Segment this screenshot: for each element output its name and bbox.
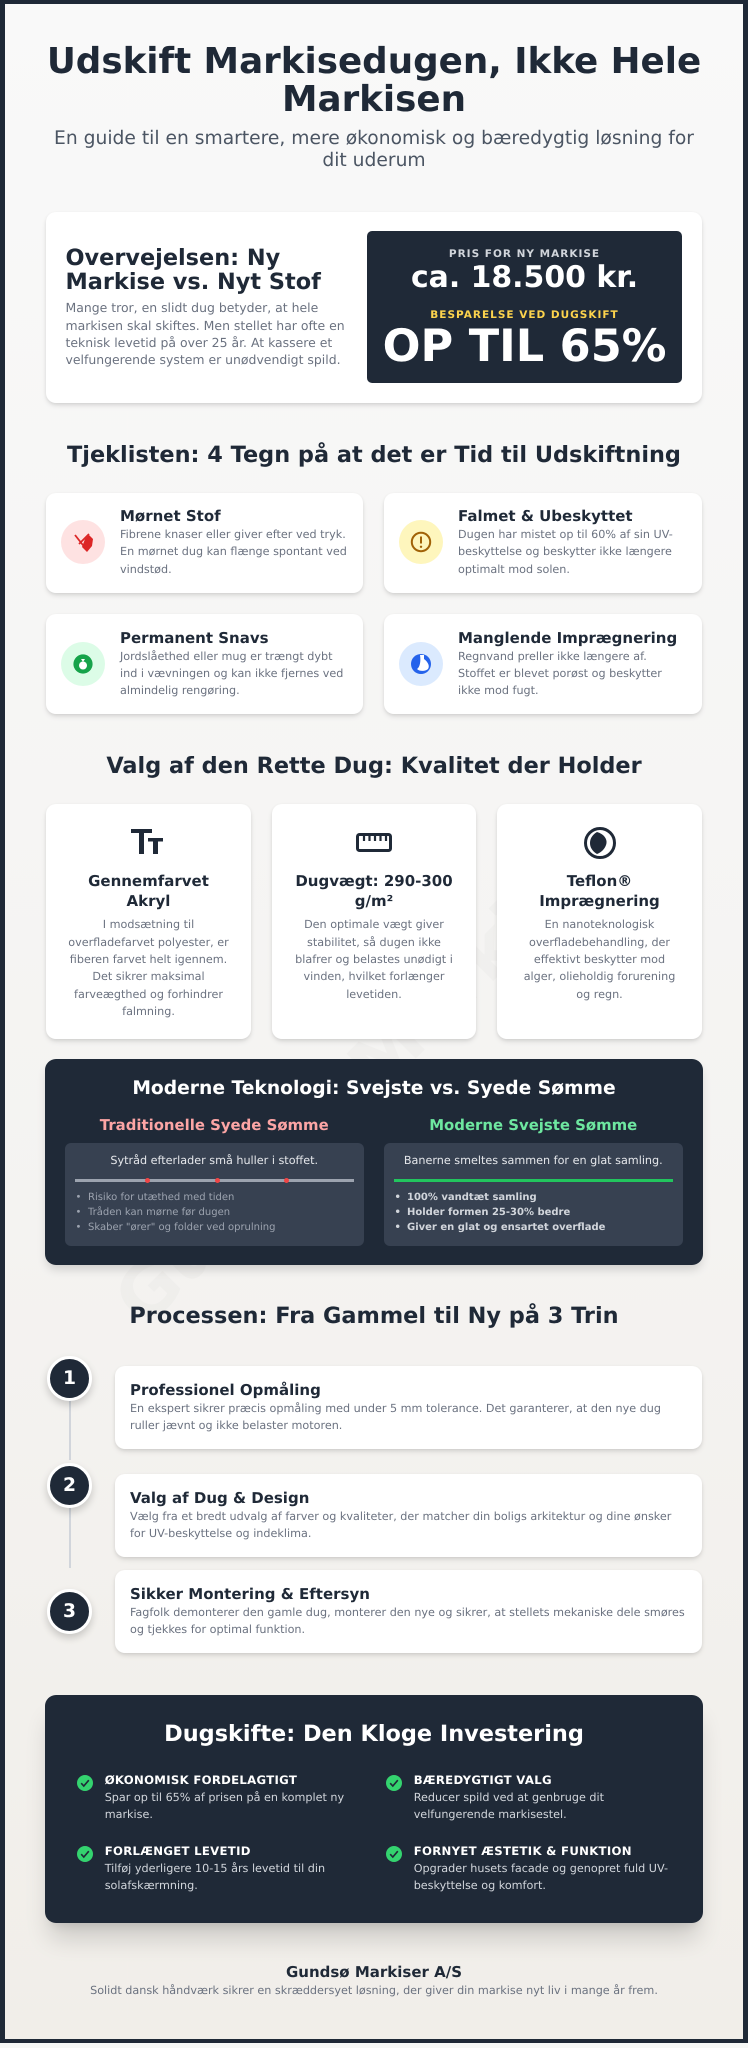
bullet list: Risiko for utæthed med tiden [88,1192,234,1203]
text [130,1606,685,1636]
icon: warning [399,520,443,564]
text: Jordslåethed eller mug er trængt dybt [120,650,332,662]
weld line [394,1179,673,1182]
number [47,1356,92,1401]
benefit text: Opgrader husets facade og genopret fuld UV- [414,1862,668,1875]
icon: coating [584,827,616,859]
benefit text: Reducer spild ved at genbruge dit [414,1791,604,1804]
benefit text [104,1862,325,1892]
benefit text: velfungerende markisestel. [414,1808,567,1821]
footer [90,1963,658,1997]
hero heading [66,245,322,295]
benefit text: beskyttelse og komfort. [414,1879,546,1892]
card: teflon [497,804,702,1039]
text: Regnvand preller ikke længere af. [458,650,647,662]
title: Professionel Opmåling [130,1381,321,1399]
bullet list [394,1192,605,1233]
title: Udskift Markisedugen, Ikke Hele [47,41,701,82]
heading: processen: Processen: Fra Gammel til Ny på 3 Trin [129,1303,619,1329]
text: beskyttelse og beskytter ikke længere [458,545,672,558]
saving label: BESPARELSE VED DUGSKIFT [430,309,619,321]
benefit title: FORLÆNGET LEVETID [105,1844,251,1858]
title: Manglende Imprægnering [458,629,677,647]
right column title: Moderne Svejste Sømme [429,1116,637,1134]
price value: ca. 18.500 kr. [411,260,638,295]
step card [115,1474,702,1557]
text: I modsætning til [103,918,194,931]
connector 2 [68,1508,70,1568]
icon: stain [61,642,105,686]
icon: check [386,1775,402,1791]
panel: overvejelsen [46,212,702,403]
hero heading: Markise vs. Nyt Stof [66,269,321,295]
benefit text: Spar op til 65% af prisen på en komplet ny [105,1791,344,1804]
card: manglende imprægnering [384,614,702,714]
bullet list: • [394,1207,401,1218]
bullet list: 100% vandtæt samling [407,1192,537,1203]
card: dugvægt [272,804,476,1039]
benefit: levetid [77,1844,325,1892]
step 2 [44,1463,704,1561]
text: optimalt mod solen. [458,563,570,576]
step 3 [44,1570,704,1657]
text: levetiden. [346,988,402,1001]
bullet list: • [394,1192,401,1203]
text: blafrer og belastes unødigt i [295,953,453,966]
text: Fibrene knaser eller giver efter ved tryk. [120,528,346,541]
benefit text [105,1791,344,1821]
benefit text: solafskærmning. [105,1879,198,1892]
text: En nanoteknologisk [545,918,654,931]
panel title: Dugskifte: Den Kloge Investering [164,1721,584,1747]
bullet list: • [76,1207,81,1218]
panel: moderne teknologi [45,1059,703,1265]
hero text: velfungerende system er unødvendigt spild. [66,352,341,367]
text [130,1402,661,1432]
bullet list: Holder formen 25-30% bedre [407,1207,570,1218]
text: ruller jævnt og ikke belaster motoren. [130,1419,342,1432]
hero text: Mange tror, en slidt dug betyder, at hele [66,300,318,315]
title: Teflon® [567,872,632,890]
benefit: bæredygtigt [386,1773,604,1821]
hero heading: Overvejelsen: Ny [66,245,280,271]
hero text [66,300,345,367]
bullet list: • [394,1222,401,1233]
left column title: Traditionelle Syede Sømme [100,1116,329,1134]
benefit text: Tilføj yderligere 10-15 års levetid til din [105,1862,325,1875]
text: En mørnet dug kan flænge spontant ved [120,545,347,558]
subtitle: dit uderum [322,150,426,171]
title: Mørnet Stof [120,507,221,525]
text [458,528,673,576]
box: sewn seams [65,1143,364,1246]
text: falmning. [122,1005,175,1018]
saving value: OP TIL 65% [383,320,666,372]
text: Vælg fra et bredt udvalg af farver og kvaliteter, der matcher din boligs arkitektur og dine ønsker [130,1510,671,1523]
text [458,650,662,697]
bullet list: Tråden kan mørne før dugen [88,1207,230,1218]
hero text: teknisk levetid på over 25 år. At kassere et [66,335,332,350]
text: Dugen har mistet op til 60% af sin UV- [458,528,673,541]
text: ind i vævningen og kan ikke fjernes ved [120,667,343,680]
title: Gennemfarvet [88,872,209,890]
benefit text [414,1862,668,1892]
title [88,872,209,910]
heading: valg af dug: Valg af den Rette Dug: Kvalitet der Holder [106,753,642,779]
benefit title: BÆREDYGTIGT VALG [414,1773,552,1787]
hero text: markisen skal skiftes. Men stellet har ofte en [66,318,345,333]
icon: check [77,1775,93,1791]
price box [367,231,682,383]
caption: Banerne smeltes sammen for en glat samling. [404,1154,663,1167]
title: Imprægnering [539,892,660,910]
box: welded seams [384,1143,682,1246]
card: gennemfarvet akryl [46,804,251,1039]
text: og tjekkes for optimal funktion. [130,1623,305,1636]
bullet list: Giver en glat og ensartet overflade [407,1222,605,1233]
benefit text: markise. [105,1808,153,1821]
text [130,1510,672,1540]
benefit title: ØKONOMISK FORDELAGTIGT [105,1773,297,1787]
step card [115,1570,702,1653]
text: vinden, hvilket forlænger [304,970,444,983]
benefit title: FORNYET ÆSTETIK & FUNKTION [414,1844,632,1858]
text [295,918,453,1001]
text: vindstød. [120,563,172,576]
title [539,872,660,910]
icon: text [131,829,163,854]
caption: Sytråd efterlader små huller i stoffet. [110,1154,318,1167]
text: overfladebehandling, der [529,936,670,949]
card: falmet [384,493,702,593]
subtitle [54,128,694,171]
text [119,650,343,697]
icon: water drop [399,642,443,686]
text [524,918,675,1001]
bullet list: Skaber "ører" og folder ved oprulning [88,1222,275,1233]
text: ikke mod fugt. [458,684,539,697]
subtitle: En guide til en smartere, mere økonomisk og bæredygtig løsning for [54,128,694,149]
bullet list: • [76,1192,81,1203]
company name: Gundsø Markiser A/S [286,1963,462,1981]
number: 1 [63,1368,76,1389]
text: Stoffet er blevet porøst og beskytter [458,667,662,680]
text: fiberen farvet helt igennem. [70,953,227,966]
title [47,41,701,120]
icon: check [77,1846,93,1862]
title: Falmet & Ubeskyttet [458,507,633,525]
title: Permanent Snavs [120,629,269,647]
text [68,918,229,1018]
title: Sikker Montering & Eftersyn [130,1585,370,1603]
step card [115,1366,702,1449]
icon: ruler [356,833,392,852]
card: mørnet stof [46,493,363,593]
text [120,528,347,576]
text: effektivt beskytter mod [534,953,665,966]
number [47,1589,92,1634]
text: for UV-beskyttelse og indeklima. [130,1527,311,1540]
benefit: økonomi [77,1773,344,1821]
text: stabilitet, så dugen ikke [307,936,441,949]
tagline: Solidt dansk håndværk sikrer en skræddersyet løsning, der giver din markise nyt liv i mange år frem. [90,1984,658,1997]
text: En ekspert sikrer præcis opmåling med under 5 mm tolerance. Det garanterer, at den nye dug [130,1402,661,1415]
text: Den optimale vægt giver [304,918,444,931]
step 1 [44,1356,704,1453]
title: Akryl [127,892,170,910]
price label: PRIS FOR NY MARKISE [449,248,600,260]
watermark: Gundsø Markiser [98,797,642,1341]
number: 2 [63,1475,76,1496]
text: og regn. [576,988,623,1001]
text: almindelig rengøring. [120,684,240,697]
benefit text [414,1791,604,1821]
number [47,1463,92,1508]
bullet list [76,1192,275,1233]
text: overfladefarvet polyester, er [68,936,229,949]
bullet list: • [76,1222,81,1233]
icon: torn fabric [61,520,105,564]
title [295,872,453,910]
icon: check [386,1846,402,1862]
panel: den kloge investering [45,1695,703,1923]
text: alger, olieholdig forurening [524,970,675,983]
connector 1 [68,1400,70,1460]
title: Dugvægt: 290-300 [295,872,453,890]
panel title: Moderne Teknologi: Svejste vs. Syede Sømme [132,1078,616,1099]
heading: tjeklisten: Tjeklisten: 4 Tegn på at det er Tid til Udskiftning [67,442,681,468]
title: Markisen [282,78,466,120]
text: Fagfolk demonterer den gamle dug, monterer den nye og sikrer, at stellets mekaniske dele smøres [130,1606,685,1619]
text: Det sikrer maksimal [92,970,205,983]
title: g/m² [355,892,393,910]
card: permanent snavs [46,614,363,714]
number: 3 [63,1601,76,1622]
benefit: æstetik [386,1844,668,1892]
title: Valg af Dug & Design [130,1489,309,1507]
text: farveægthed og forhindrer [74,988,223,1001]
seam diagram [75,1179,354,1182]
